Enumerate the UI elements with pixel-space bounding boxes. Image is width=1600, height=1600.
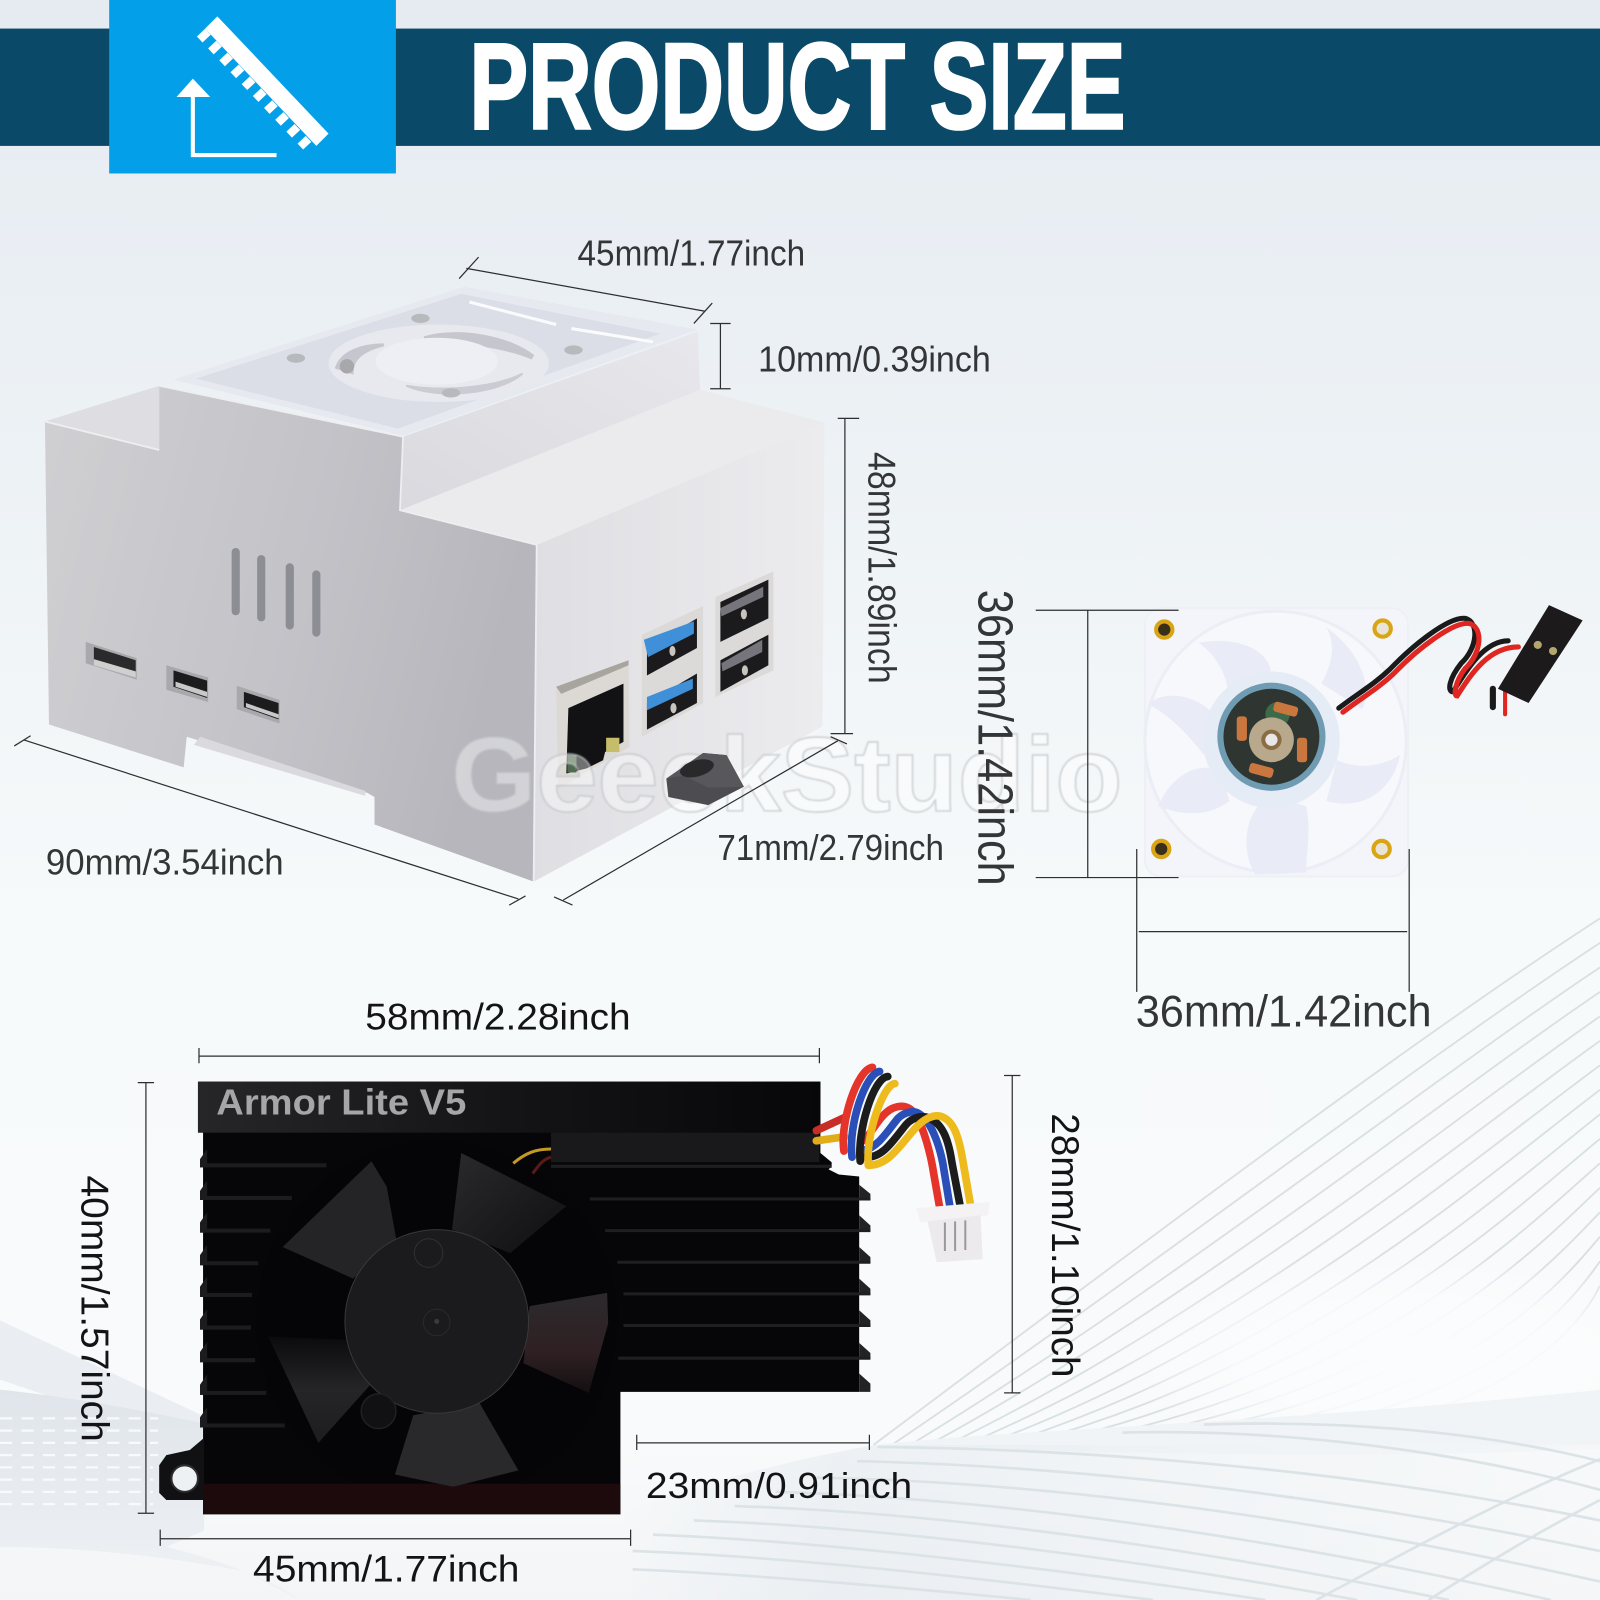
side button: [666, 753, 744, 805]
header icon: ruler with axes: [109, 0, 396, 173]
title: PRODUCT SIZE: [469, 18, 1126, 155]
left step top: [45, 386, 159, 450]
right fin highlights: [551, 1166, 870, 1358]
product: transparent fan: [1145, 605, 1583, 877]
fan blades: [1148, 628, 1400, 874]
ethernet port: [556, 660, 630, 789]
small wires behind fan: [513, 1149, 551, 1173]
fan dimension lines: [1036, 610, 1409, 992]
right fin tips: [859, 1185, 870, 1392]
USB 2 ports: [715, 571, 773, 697]
case left face: [45, 386, 537, 882]
product: enclosure case: [45, 287, 1122, 882]
fan housing: [256, 1141, 617, 1502]
colored ribbon wire: [816, 1067, 970, 1208]
fan blades: [268, 1153, 608, 1487]
header band: [0, 29, 1600, 146]
label: case length: 90mm/3.54inch: [46, 842, 284, 882]
watermark: GeeekStudio: [451, 716, 1122, 834]
label: lid height: 10mm/0.39inch: [758, 339, 991, 379]
foot slot: [194, 737, 365, 796]
corner eyelets: [1153, 620, 1391, 857]
mounting ear hole: [171, 1465, 198, 1492]
case right face: [534, 422, 824, 882]
side ports: USB-C and micro HDMI: [86, 642, 280, 723]
foam strip: [551, 1133, 819, 1162]
bottom strip: [203, 1484, 620, 1514]
label: case width: 45mm/1.77inch: [578, 233, 805, 273]
fan wires and plug: [1339, 605, 1583, 714]
acrylic lid: [173, 287, 697, 436]
fan hub: [345, 1230, 529, 1413]
product name: Armor Lite V5: [216, 1082, 466, 1122]
top plate: [198, 1082, 820, 1133]
raised section side: [400, 332, 700, 510]
heatsink dimension lines: [138, 1048, 1020, 1546]
case step top: [400, 390, 824, 545]
case edges highlight: [45, 386, 537, 882]
label: heatsink base width: 45mm/1.77inch: [253, 1549, 519, 1590]
label: heatsink width: 58mm/2.28inch: [365, 997, 631, 1038]
label: heatsink fin height: 28mm/1.10inch: [1043, 1113, 1086, 1378]
screw: [361, 1394, 396, 1429]
label: fan width: 36mm/1.42inch: [1136, 986, 1432, 1037]
heatsink body: [198, 1082, 859, 1514]
product: Armor Lite V5 heatsink: [159, 1067, 990, 1514]
label: case height: 48mm/1.89inch: [859, 452, 902, 684]
label: fin width: 23mm/0.91inch: [646, 1466, 912, 1506]
vents: [232, 548, 320, 637]
left fins: [200, 1149, 327, 1428]
mounting ear: [159, 1439, 203, 1500]
label: heatsink height: 40mm/1.57inch: [73, 1176, 116, 1442]
wire connector: [916, 1202, 990, 1262]
label: case depth: 71mm/2.79inch: [717, 828, 944, 868]
label: fan height: 36mm/1.42inch: [968, 590, 1022, 886]
case dimension lines: [14, 257, 859, 905]
USB 3 ports: [642, 606, 703, 737]
fan hub: [1203, 671, 1340, 808]
